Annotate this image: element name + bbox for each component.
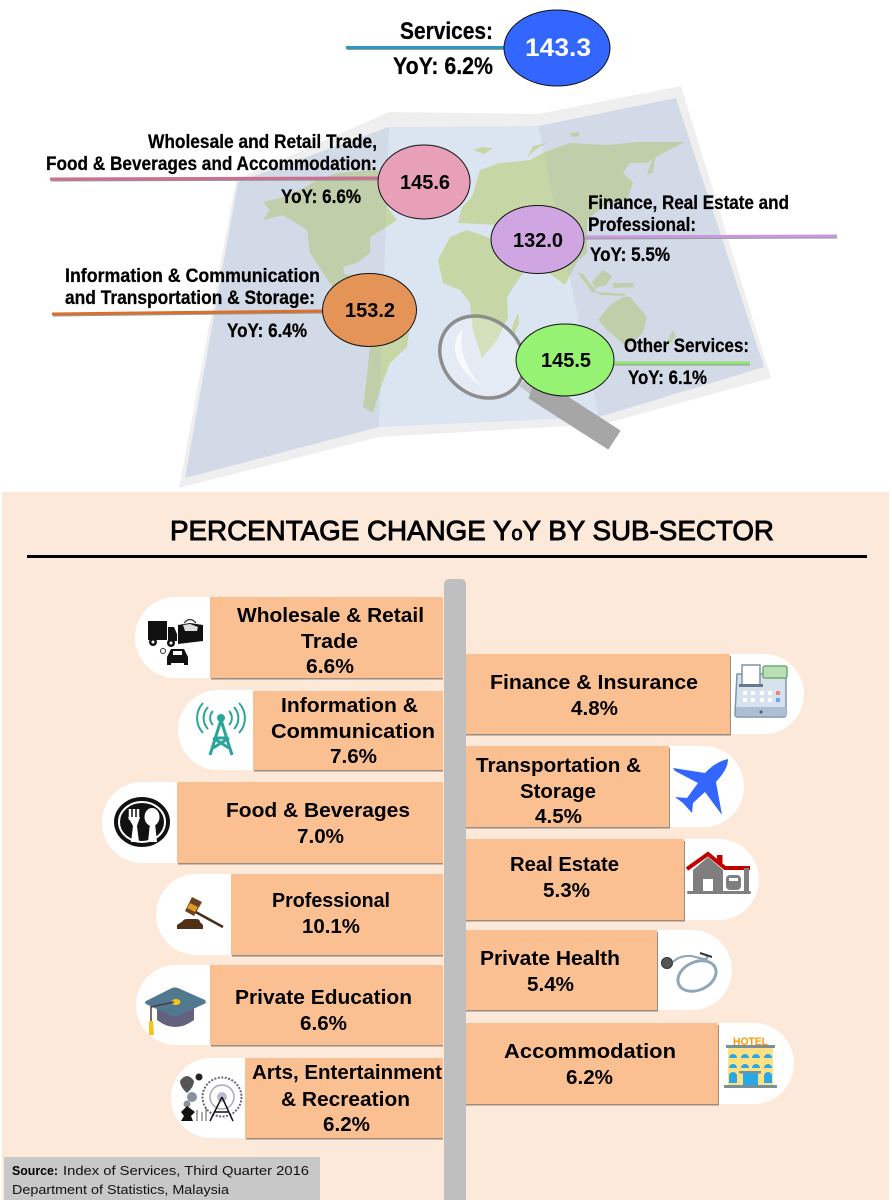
callout: services: Services: (400, 18, 493, 45)
row: information and communication: Communication (271, 721, 435, 743)
icon: gavel (177, 897, 223, 929)
callout: other services: Other Services: (624, 336, 749, 357)
row: food and beverages: Food & Beverages (226, 800, 410, 822)
row: transportation and storage: Storage (520, 781, 596, 803)
row: real estate: Real Estate (510, 854, 619, 876)
row: food and beverages (102, 782, 443, 864)
row: real estate: 5.3% (543, 880, 590, 902)
source note: Department of Statistics, Malaysia (12, 1182, 230, 1197)
row: professional: Professional (272, 890, 390, 912)
icon: stethoscope (662, 953, 721, 997)
icon: plate with fork and spoon (114, 797, 170, 847)
row: private health: 5.4% (527, 974, 574, 996)
callout: other services: YoY: 6.1% (628, 368, 707, 389)
callout: information, communication, transportation and storage (52, 266, 416, 346)
callout: wholesale and retail trade, food and beverages, accommodation: Wholesale and Retail Trade, (148, 132, 377, 153)
row: arts, entertainment and recreation: 6.2% (323, 1114, 370, 1136)
row: food and beverages: 7.0% (297, 826, 344, 848)
callout: services (346, 10, 610, 86)
row: information and communication: Information & (281, 695, 418, 717)
row: wholesale and retail trade: 6.6% (306, 656, 354, 678)
callout: services: 143.3 (525, 34, 591, 62)
row: private education (136, 965, 443, 1046)
row: wholesale and retail trade (135, 597, 443, 680)
callout: finance, real estate and professional: Professional: (588, 215, 696, 236)
row: private education: Private Education (235, 987, 412, 1009)
icon: airplane (673, 759, 728, 815)
callout: wholesale and retail trade, food and beverages, accommodation: Food & Beverages and Accommodation: (46, 154, 377, 175)
continents (263, 132, 685, 413)
row: private health: Private Health (480, 948, 620, 970)
source note: Source: (12, 1163, 58, 1178)
callout: finance, real estate and professional: YoY: 5.5% (590, 245, 670, 266)
callout: information, communication, transportation and storage: Information & Communication (65, 266, 320, 287)
icon: ferris wheel, balloon, trees (180, 1074, 242, 1121)
row: finance and insurance (466, 654, 804, 736)
row: professional: 10.1% (302, 916, 360, 938)
magnifying glass (423, 299, 619, 448)
source note (4, 1157, 320, 1200)
row: transportation and storage (466, 746, 744, 828)
row: information and communication: 7.6% (330, 746, 377, 768)
row: private health (466, 930, 732, 1012)
icon: cash register (735, 665, 787, 717)
row: accommodation: Accommodation (504, 1041, 676, 1063)
row: real estate (466, 839, 759, 922)
callout: services: YoY: 6.2% (393, 53, 493, 80)
callout: information, communication, transportation and storage: 153.2 (345, 300, 395, 322)
central rail (444, 579, 466, 1200)
icon: graduation cap (145, 988, 206, 1035)
row: accommodation (466, 1023, 794, 1106)
heading: PERCENTAGE CHANGE YoY BY SUB-SECTOR (170, 515, 774, 546)
row: information and communication (178, 690, 443, 772)
icon: antenna tower (197, 703, 245, 755)
row: arts, entertainment and recreation: & Recreation (281, 1089, 410, 1111)
icon: hotel building: HOTEL (733, 1036, 768, 1048)
callout: finance, real estate and professional: 132.0 (513, 230, 563, 252)
source note: Index of Services, Third Quarter 2016 (63, 1163, 309, 1178)
callout: wholesale and retail trade, food and beverages, accommodation: 145.6 (400, 172, 450, 194)
row: arts, entertainment and recreation (171, 1058, 443, 1140)
row: transportation and storage: Transportation & (476, 755, 641, 777)
row: wholesale and retail trade: Wholesale & Retail (237, 605, 424, 627)
row: arts, entertainment and recreation: Arts, Entertainment (252, 1062, 442, 1084)
callout: other services: 145.5 (541, 350, 591, 372)
row: professional (156, 874, 443, 956)
callout: information, communication, transportation and storage: and Transportation & Storage: (65, 288, 315, 309)
icon: house with car (687, 854, 751, 894)
callout: finance, real estate and professional (491, 193, 837, 274)
icon: truck, shopping bag, car (148, 620, 203, 665)
callout: finance, real estate and professional: Finance, Real Estate and (588, 193, 789, 214)
callout: wholesale and retail trade, food and beverages, accommodation: YoY: 6.6% (281, 187, 361, 208)
panel: percentage change by sub-sector (2, 492, 889, 1200)
map illustration (179, 86, 771, 488)
callout: wholesale and retail trade, food and beverages, accommodation (46, 132, 470, 219)
row: accommodation: 6.2% (566, 1067, 613, 1089)
row: wholesale and retail trade: Trade (301, 631, 358, 653)
row: finance and insurance: Finance & Insurance (490, 672, 698, 694)
row: private education: 6.6% (300, 1013, 347, 1035)
row: transportation and storage: 4.5% (535, 806, 582, 828)
row: finance and insurance: 4.8% (571, 698, 618, 720)
callout: other services (516, 324, 750, 396)
callout: information, communication, transportation and storage: YoY: 6.4% (227, 321, 307, 342)
icon: hotel building (724, 1036, 777, 1088)
